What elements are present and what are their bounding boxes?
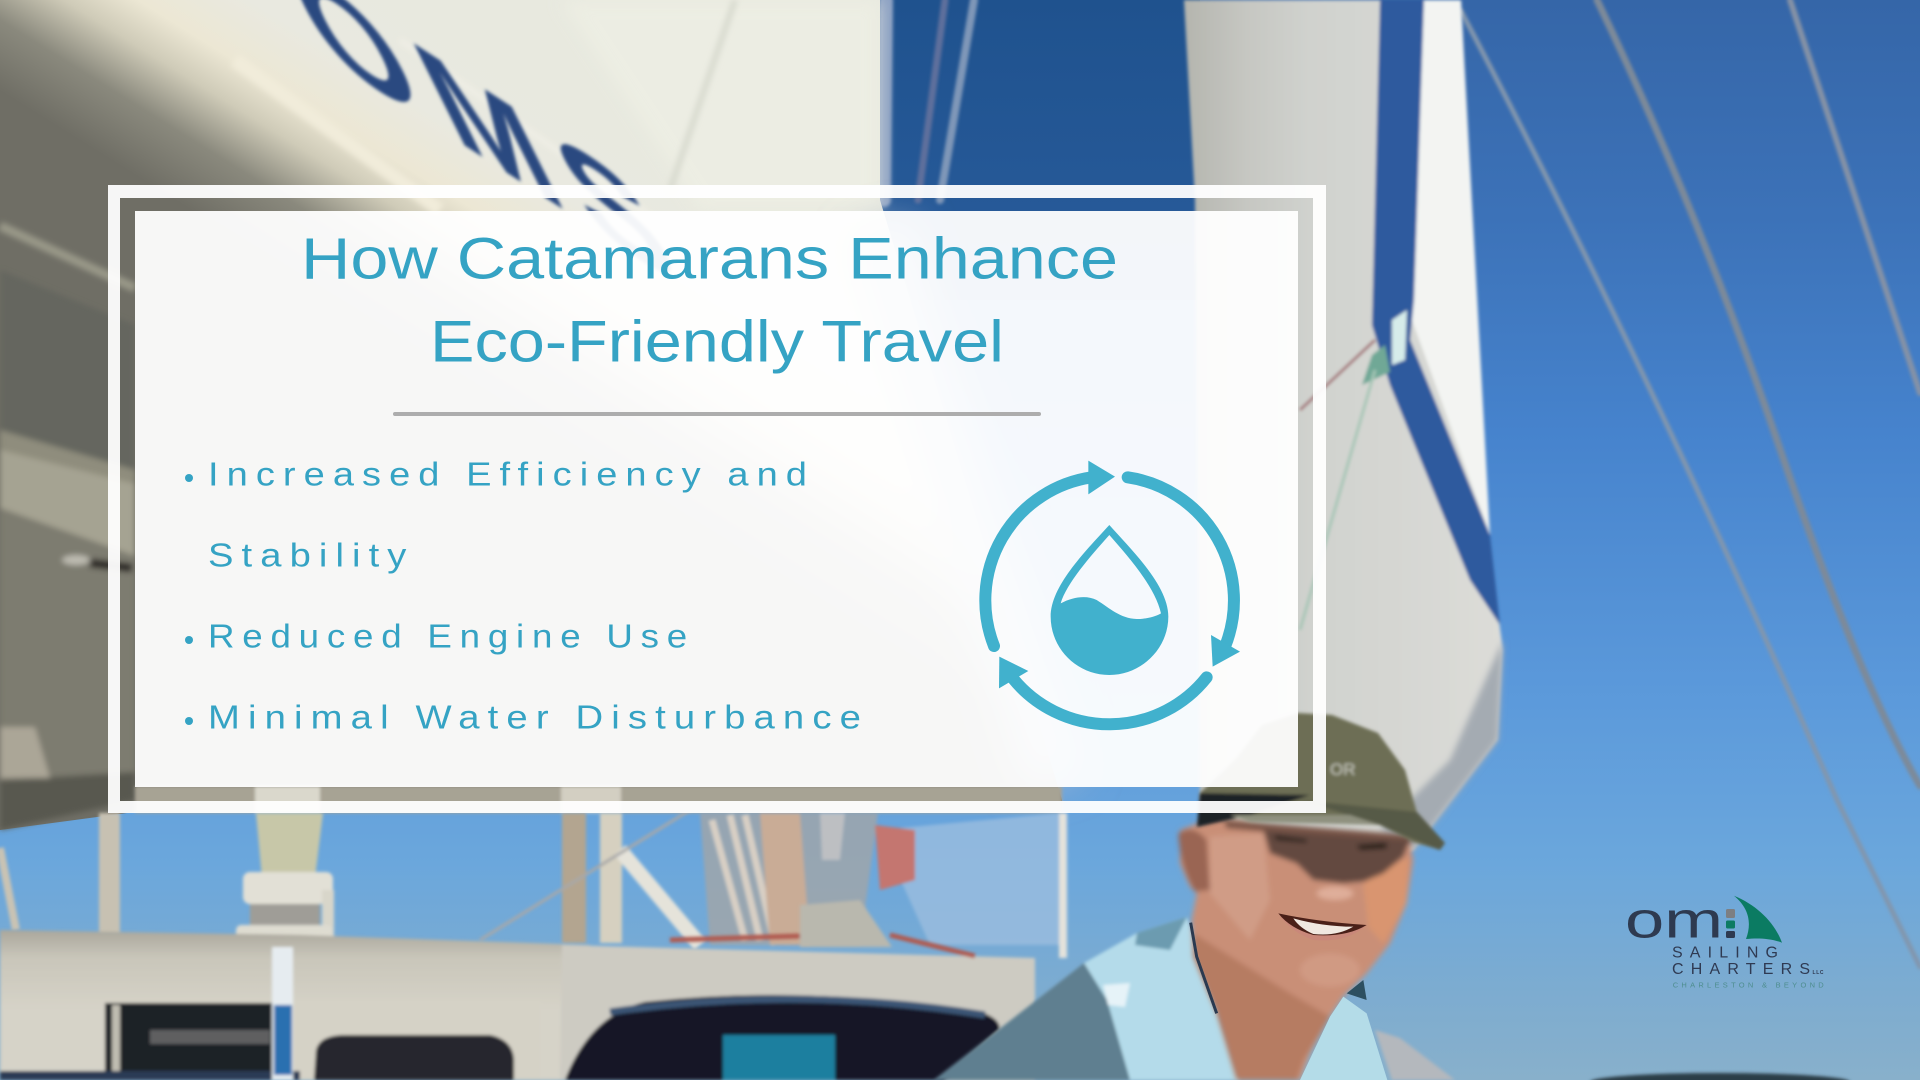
title: How Catamarans Enhance bbox=[301, 226, 1118, 292]
bullet list: Minimal Water Disturbance bbox=[208, 698, 869, 736]
face and neck bbox=[1178, 817, 1413, 1080]
divider bbox=[393, 412, 1041, 416]
left hull shading bbox=[0, 226, 135, 830]
cap: OR bbox=[1330, 760, 1356, 779]
bullet list: Stability bbox=[208, 536, 414, 574]
rigging wires bbox=[884, 0, 1920, 967]
cap bbox=[1197, 713, 1445, 850]
white rail and distant horizon bbox=[1375, 1030, 1850, 1080]
cabin and windows bbox=[0, 900, 1035, 1080]
bullet list: Reduced Engine Use bbox=[208, 618, 695, 655]
lower-frame strip of deck and mast bbox=[135, 786, 1062, 813]
logo: OMI Sailing Charters: LLC bbox=[1812, 970, 1824, 976]
title bbox=[301, 226, 1118, 374]
logo: OMI Sailing Charters: om bbox=[1625, 891, 1723, 948]
content panel bbox=[135, 211, 1298, 787]
outer white frame bbox=[108, 185, 1326, 813]
logo: OMI Sailing Charters: CHARTERS bbox=[1672, 961, 1810, 978]
bullet list bbox=[185, 456, 869, 736]
title: Eco-Friendly Travel bbox=[430, 310, 1004, 374]
logo: OMI Sailing Charters: CHARLESTON & BEYOND bbox=[1673, 981, 1824, 990]
bullet list: Increased Efficiency and bbox=[208, 456, 815, 493]
skipper in cap and light blue shirt bbox=[934, 713, 1445, 1080]
logo: OMI Sailing Charters bbox=[1625, 891, 1824, 990]
mast, poles and cockpit bbox=[0, 810, 1067, 958]
shirt shoulder bbox=[934, 917, 1240, 1080]
smile bbox=[1191, 913, 1387, 1080]
main sail with lettering bbox=[0, 0, 1062, 830]
logo: OMI Sailing Charters: SAILING bbox=[1672, 945, 1778, 962]
icon: water drop in recycling arrows bbox=[985, 461, 1240, 724]
jib sail bbox=[1184, 0, 1503, 900]
